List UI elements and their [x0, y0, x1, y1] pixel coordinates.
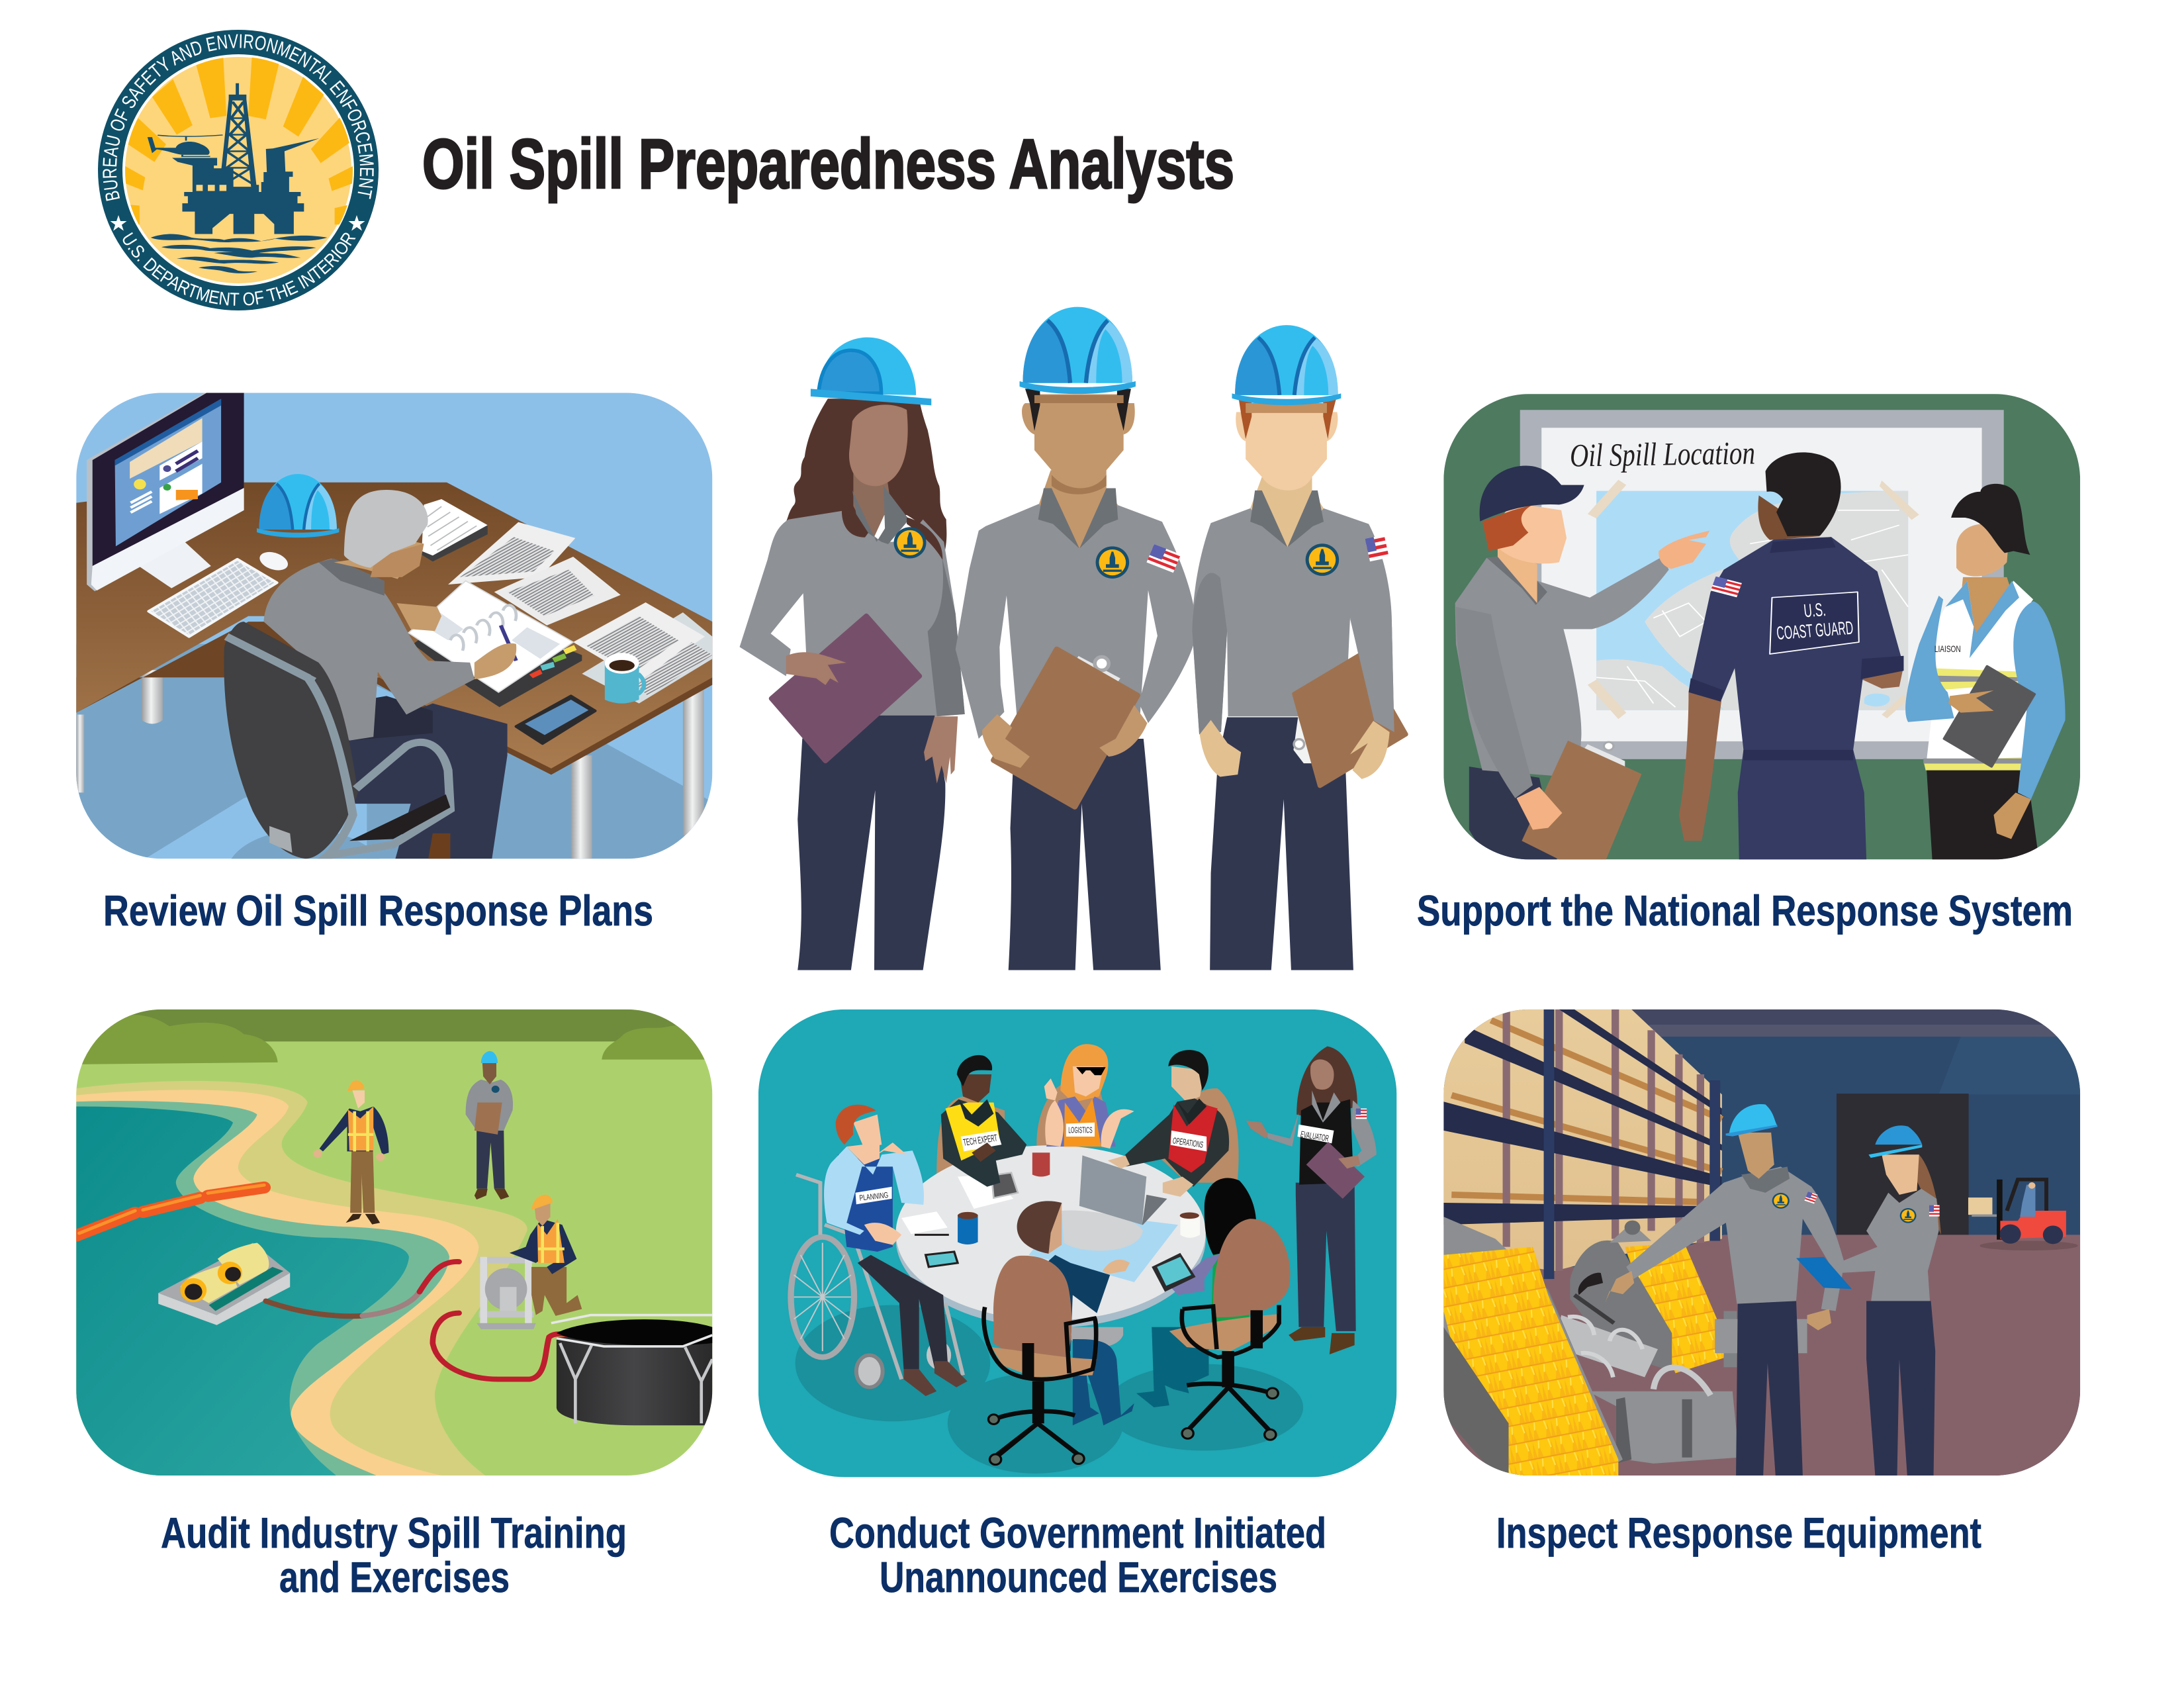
person: logistics: [1044, 1044, 1134, 1149]
foreground chair left: [984, 1256, 1097, 1465]
coffee mug: [605, 653, 644, 704]
seal stars: [110, 215, 365, 231]
floor: [1443, 1235, 2080, 1476]
caption: conduct: Conduct Government Initiated: [829, 1509, 1326, 1557]
ceiling beam: [1631, 1009, 2080, 1094]
back doorway: [1837, 1094, 1969, 1236]
foreground chair right: [1169, 1219, 1291, 1440]
desk legs: [76, 670, 704, 859]
hard hat on desk: [257, 474, 339, 538]
person: evaluator: [1246, 1047, 1377, 1354]
liaison woman: [1905, 484, 2066, 859]
map: [1596, 491, 1908, 710]
person: operations: [1108, 1050, 1229, 1197]
title: Oil Spill Preparedness Analysts: [422, 125, 1234, 203]
loose papers: [448, 522, 712, 704]
far skimmer brushes: [1625, 1243, 1807, 1373]
logo: BSEE seal: [98, 30, 379, 310]
binder: [408, 581, 582, 707]
caption: inspect: Inspect Response Equipment: [1496, 1509, 1981, 1557]
phone: [516, 696, 595, 743]
coast guard officer: [1679, 452, 1903, 859]
man in cap pointing: [1455, 465, 1709, 859]
keyboard: [149, 559, 277, 637]
person: operations: OPERATIONS: [1172, 1135, 1204, 1150]
desk: [76, 483, 712, 774]
inspector man pointing: [1605, 1104, 1844, 1476]
shoreline bands: [76, 1081, 527, 1476]
map board: [1520, 410, 2004, 759]
analyst: man in centre with clipboard: [956, 307, 1197, 970]
helicopter: [148, 137, 210, 155]
person: seated foreground man: [1011, 1201, 1134, 1425]
panel: review oil spill response plans: [76, 393, 712, 859]
kneeling responder: [510, 1195, 582, 1316]
computer monitor: [87, 393, 244, 591]
coast guard back patch: COAST GUARD: [1776, 617, 1854, 643]
handwritten map title: Oil Spill Location: [1569, 435, 1755, 474]
seal ring text: top: BUREAU OF SAFETY AND ENVIRONMENTAL ENFORCEMENT: [103, 34, 374, 201]
person: tech expert: TECH EXPERT: [962, 1133, 998, 1149]
waves: [151, 234, 327, 273]
skimmer: [158, 1243, 290, 1325]
responder pointing: [313, 1080, 388, 1225]
office chair: [224, 622, 450, 859]
treeline and bushes: [76, 1009, 712, 1064]
person: evaluator: EVALUATOR: [1300, 1129, 1330, 1143]
caption: conduct: Unannounced Exercises: [880, 1553, 1277, 1601]
tape pieces: [1588, 480, 1919, 719]
liaison woman: LIAISON: [1934, 645, 1961, 655]
table map: [1029, 1210, 1178, 1282]
skimmer housing and handles: [1541, 1221, 1739, 1464]
caption: audit: [161, 1509, 627, 1601]
caption: audit: Audit Industry Spill Training: [161, 1509, 627, 1557]
coast guard back patch: U.S.: [1803, 599, 1827, 622]
seated man: [263, 490, 516, 859]
central figures: three analysts: [740, 307, 1406, 970]
tank: [551, 1315, 712, 1425]
person: logistics: LOGISTICS: [1068, 1125, 1093, 1135]
floor shadows: [796, 1305, 1303, 1474]
panel: conduct government initiated exercises: [758, 1009, 1396, 1477]
table items: [901, 1152, 1200, 1267]
diaphragm pump: [477, 1257, 536, 1329]
analyst: woman with purple folder: [740, 338, 965, 970]
notepad: [422, 499, 488, 561]
panel: support the national response system: [1443, 394, 2080, 859]
hoses: [266, 1262, 578, 1380]
clipboard: [1583, 744, 1625, 767]
person: planning in wheelchair: [791, 1105, 968, 1396]
person: foreground woman with tablet: [1136, 1178, 1256, 1407]
forklift: [1968, 1180, 2078, 1250]
seal artwork: sun rays and oil rig: [122, 56, 357, 273]
inspector woman with tablet: [1796, 1125, 1941, 1476]
analyst: man on right with clipboard: [1193, 325, 1406, 970]
coast guard back patch: [1770, 592, 1859, 654]
caption: conduct: [829, 1509, 1326, 1601]
seal ring text: bottom: U.S. DEPARTMENT OF THE INTERIOR: [123, 232, 356, 306]
laptop: [1079, 1155, 1167, 1225]
person: tech expert: [941, 1055, 1026, 1187]
panel: inspect response equipment: [1443, 1009, 2080, 1476]
floor: [76, 644, 712, 859]
warehouse shelving: [1443, 1009, 1722, 1279]
foreground skimmer brushes: [1443, 1217, 1623, 1476]
containment boom: [76, 1185, 264, 1236]
chairs behind table: [936, 1082, 1239, 1183]
panel: audit industry spill training: [76, 1009, 712, 1476]
caption: review: Review Oil Spill Response Plans: [103, 886, 653, 935]
table: [896, 1145, 1206, 1348]
caption: audit: and Exercises: [279, 1553, 510, 1601]
analyst with clipboard: [466, 1051, 513, 1199]
mouse: [259, 552, 288, 571]
person: planning in wheelchair: PLANNING: [859, 1191, 889, 1203]
